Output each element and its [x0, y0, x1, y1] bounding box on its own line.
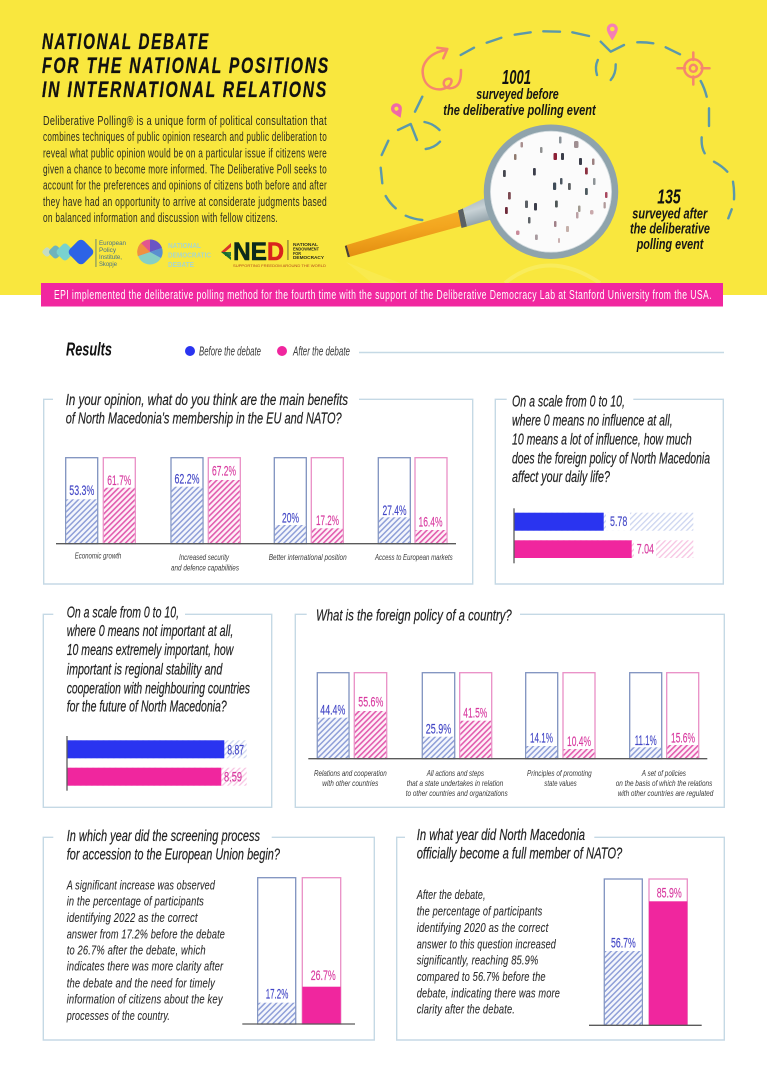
map route: dashed line [381, 31, 734, 220]
bar chart: foreign policy: 41.5% [463, 704, 487, 720]
logo: National Endowment for Democracy: ENDOWMENT [293, 246, 319, 252]
explanatory text: significantly, reaching 85.9% [417, 954, 538, 968]
bar chart: benefits: 17.2% [316, 512, 339, 528]
bar chart: screening year [242, 878, 355, 1024]
panel heading [512, 394, 710, 486]
bar chart: benefits: 27.4% [382, 502, 406, 518]
intro text block: they have had an opportunity to arrive at considerate judgments based [43, 195, 327, 209]
panel: foreign policy effect on daily life [495, 394, 723, 584]
icon: magnifying glass with crowd [345, 128, 615, 283]
bar chart: benefits: 16.4% [418, 514, 442, 530]
intro text block: Deliberative Polling® is a unique form of political consultation that [43, 114, 327, 128]
category labels: and defence capabilities [171, 563, 240, 573]
bar chart: screening year: 26.7% [311, 967, 336, 983]
stat: 1001 surveyed before [443, 67, 597, 119]
category labels: state values [544, 778, 577, 788]
category labels: on the basis of which the relations [616, 778, 713, 788]
panel heading: On a scale from 0 to 10, [512, 394, 625, 411]
panel: what is foreign policy [295, 608, 724, 807]
bar chart: foreign policy [308, 673, 707, 759]
explanatory text [66, 878, 225, 1023]
category labels: Access to European markets [374, 552, 453, 562]
explanatory text: After the debate, [416, 888, 486, 902]
logo: National Endowment for Democracy: NE [233, 238, 267, 266]
logo: National Democratic Debate [137, 239, 211, 269]
bar chart: foreign policy: 25.9% [426, 720, 451, 736]
explanatory text: information of citizens about the key [67, 993, 223, 1007]
panel heading: In which year did the screening process [67, 828, 260, 845]
panel heading [67, 604, 250, 716]
bar chart: benefits: 20% [282, 509, 299, 525]
stat: 135 surveyed after: 135 [657, 186, 681, 208]
explanatory text: compared to 56.7% before the [417, 970, 546, 984]
panel: main benefits of membership [44, 392, 473, 584]
logo: National Endowment for Democracy [221, 238, 326, 268]
panel heading: cooperation with neighbouring countries [67, 680, 250, 697]
panel heading: In what year did North Macedonia [417, 827, 585, 844]
bar chart: benefits: 61.7% [107, 472, 131, 488]
bar chart: foreign policy: 44.4% [320, 701, 345, 717]
explanatory text: in the percentage of participants [67, 895, 204, 909]
stat: 1001 surveyed before: 1001 [502, 67, 531, 89]
intro text block: combines techniques of public opinion research and public deliberation to [43, 130, 327, 144]
category labels: All actions and steps [426, 768, 485, 778]
bar chart: foreign policy: 14.1% [530, 729, 553, 745]
panel heading: officially become a full member of NATO? [417, 845, 623, 862]
stat: 1001 surveyed before: surveyed before [476, 87, 559, 103]
logo: National Endowment for Democracy: DEMOCRACY [293, 255, 325, 261]
bar chart: benefits: 53.3% [69, 482, 94, 498]
panel: NATO membership year [397, 827, 724, 1040]
explanatory text: answer to this question increased [417, 937, 557, 951]
panel heading: where 0 means not important at all, [67, 623, 233, 640]
panel heading: On a scale from 0 to 10, [67, 604, 179, 621]
explanatory text: debate, indicating there was more [417, 986, 560, 1000]
explanatory text: identifying 2022 as the correct [67, 911, 198, 925]
panel heading: important is regional stability and [67, 661, 223, 678]
category labels: to other countries and organizations [406, 788, 508, 798]
stat: 135 surveyed after [630, 186, 710, 253]
category labels: Increased security [179, 552, 230, 562]
icon: target [678, 52, 710, 84]
horizontal bar chart: daily life: 5.78 [610, 513, 627, 529]
logo: National Democratic Debate: NATIONAL [168, 241, 201, 250]
panel heading [67, 828, 280, 863]
icon: spiral arrow [423, 48, 461, 89]
logo: National Democratic Debate: DEMOCRATIC [168, 250, 211, 260]
title: IN INTERNATIONAL RELATIONS [42, 77, 328, 102]
icon: map pin top [607, 24, 618, 40]
category labels: Economic growth [75, 550, 121, 560]
explanatory text: clarity after the debate. [417, 1003, 515, 1017]
category labels: Principles of promoting [527, 768, 592, 778]
category labels: Better international position [269, 552, 347, 562]
panel heading [66, 392, 348, 427]
title: NATIONAL DEBATE [42, 29, 210, 54]
panel heading: What is the foreign policy of a country? [316, 608, 512, 625]
header background [0, 0, 767, 295]
logo: National Democratic Debate: DEBATE [168, 260, 194, 269]
explanatory text [416, 888, 560, 1017]
horizontal bar chart: daily life: 7.04 [637, 540, 654, 556]
bar chart: NATO year: 56.7% [611, 934, 636, 950]
explanatory text: answer from 17.2% before the debate [67, 927, 225, 941]
bar chart: screening year: 17.2% [266, 985, 288, 1001]
explanatory text: A significant increase was observed [66, 878, 216, 892]
legend: Before the debate [199, 344, 261, 358]
stat: 135 surveyed after: surveyed after [632, 206, 708, 222]
panel heading: of North Macedonia's membership in the EU and NATO? [66, 410, 342, 427]
intro text block: account for the preferences and opinions of citizens both before and after [43, 179, 327, 193]
panel heading: where 0 means no influence at all, [512, 413, 673, 430]
bar chart: NATO year: 85.9% [657, 885, 682, 901]
panel: regional stability importance [43, 604, 272, 807]
horizontal bar chart: stability: 8.59 [224, 769, 242, 785]
explanatory text: the debate and the need for timely [67, 976, 215, 990]
horizontal bar chart: stability [67, 736, 247, 791]
logo: European Policy Institute: Policy [99, 247, 117, 254]
explanatory text: identifying 2020 as the correct [417, 921, 549, 935]
results heading: Results [66, 340, 112, 360]
logo: European Policy Institute [41, 238, 126, 268]
stat: 1001 surveyed before: the deliberative polling event [443, 103, 597, 119]
panel heading: for accession to the European Union begin? [67, 846, 280, 863]
explanatory text: the percentage of participants [417, 905, 542, 919]
category labels: A set of policies [641, 768, 687, 778]
bar chart: foreign policy: 15.6% [671, 729, 695, 745]
logo: National Endowment for Democracy: D [267, 238, 284, 266]
category labels [75, 550, 453, 573]
bar chart: benefits: 67.2% [212, 463, 236, 479]
bar chart: benefits [56, 458, 456, 544]
horizontal bar chart: daily life [514, 508, 693, 563]
intro text block: reveal what public opinion would be on a particular issue if citizens were [43, 146, 327, 160]
bar chart: foreign policy: 11.1% [635, 732, 657, 748]
category labels: that a state undertakes in relation [407, 778, 503, 788]
stat: 135 surveyed after: polling event [636, 237, 704, 253]
logo: National Endowment for Democracy: NATIONAL [293, 242, 318, 248]
category labels [314, 768, 714, 798]
explanatory text: indicates there was more clarity after [67, 960, 224, 974]
logo: European Policy Institute: Skopje [99, 261, 117, 268]
title [42, 29, 330, 102]
legend: After the debate [292, 344, 350, 358]
bar chart: benefits: 62.2% [174, 471, 200, 487]
category labels: with other countries [322, 778, 379, 788]
panel heading: 10 means extremely important, how [67, 642, 235, 659]
panel heading: for the future of North Macedonia? [67, 699, 227, 716]
logo: European Policy Institute: Institute, [99, 254, 122, 261]
explanatory text: to 26.7% after the debate, which [67, 944, 206, 958]
bar chart: foreign policy: 55.6% [358, 694, 383, 710]
horizontal bar chart: stability: 8.87 [227, 741, 244, 757]
logo: National Endowment for Democracy: FOR [293, 251, 301, 257]
panel: screening process year [43, 828, 374, 1040]
intro text block: given a chance to become more informed. The Deliberative Poll seeks to [43, 162, 327, 176]
bar chart: NATO year [589, 879, 702, 1025]
logo: National Endowment for Democracy: SUPPORTING FREEDOM AROUND THE WORLD [233, 263, 326, 268]
intro text block [43, 114, 327, 225]
panel heading [417, 827, 623, 862]
legend [185, 344, 724, 358]
intro text block: on balanced information and discussion with fellow citizens. [43, 211, 278, 225]
crowd of people [503, 136, 608, 243]
explanatory text: processes of the country. [66, 1009, 170, 1023]
category labels: with other countries are regulated [618, 788, 714, 798]
panel heading: affect your daily life? [512, 469, 610, 486]
stat: 135 surveyed after: the deliberative [630, 221, 710, 237]
icon: map pin left [389, 101, 406, 120]
category labels: Relations and cooperation [314, 768, 387, 778]
logo: European Policy Institute: European [99, 240, 126, 247]
title: FOR THE NATIONAL POSITIONS [42, 53, 330, 78]
bar chart: foreign policy: 10.4% [567, 733, 591, 749]
panel heading: In your opinion, what do you think are the main benefits [66, 392, 348, 409]
banner [41, 283, 723, 306]
